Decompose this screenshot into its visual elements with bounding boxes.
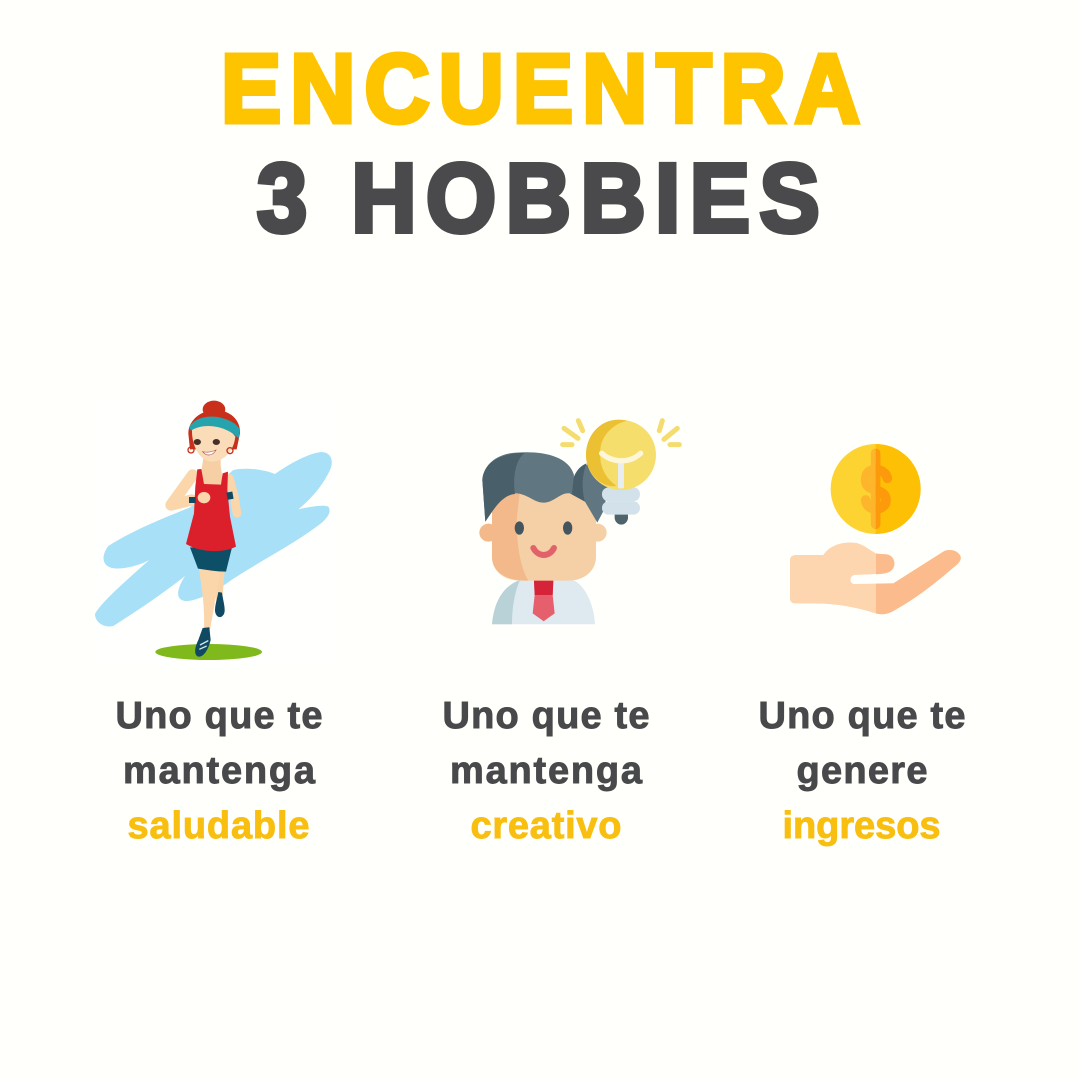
- bulb base: [615, 510, 628, 525]
- icon: hand with dollar coin: [790, 444, 961, 614]
- headband: [189, 417, 240, 439]
- rays: [563, 421, 679, 445]
- hair: [203, 401, 225, 418]
- text block: saludable: mantenga: [123, 750, 316, 792]
- front shoe: [195, 627, 211, 657]
- text block: creativo: Uno que te: [442, 695, 650, 737]
- text block: saludable: Uno que te: [116, 695, 322, 737]
- text block: ingresos: Uno que te: [758, 695, 966, 737]
- face: [192, 425, 235, 462]
- icon: man with light bulb: [479, 420, 679, 624]
- dollar sign: [860, 448, 876, 529]
- text block: ingresos: [758, 695, 966, 847]
- coin: [831, 444, 921, 534]
- text block: saludable: [116, 695, 322, 847]
- icon: runner illustration: [93, 397, 335, 663]
- mouth: [533, 548, 554, 555]
- red top: [186, 469, 236, 551]
- bulb: [586, 420, 656, 490]
- text block: ingresos: genere: [796, 750, 928, 792]
- hand: [790, 542, 961, 614]
- title: 3 HOBBIES: [257, 143, 820, 252]
- tie: [533, 580, 555, 621]
- title: ENCUENTRA: [221, 34, 860, 143]
- back hair: [570, 463, 610, 523]
- text block: ingresos: ingresos: [782, 805, 940, 847]
- back leg and shoe: [212, 567, 225, 603]
- neck and chest: [202, 455, 223, 487]
- text block: saludable: saludable: [128, 805, 310, 847]
- eyes: [515, 521, 524, 535]
- shorts: [190, 547, 232, 572]
- eyes and smile: [194, 439, 201, 445]
- body: [492, 580, 595, 624]
- title: [221, 34, 860, 252]
- text block: creativo: creativo: [470, 805, 622, 847]
- hair: [482, 452, 574, 522]
- fist and wristbands: [198, 492, 210, 503]
- front leg: [198, 565, 221, 630]
- ears: [479, 524, 497, 542]
- face: [492, 490, 596, 581]
- text block: creativo: mantenga: [450, 750, 643, 792]
- text block: creativo: [442, 695, 650, 847]
- arms: [171, 475, 193, 505]
